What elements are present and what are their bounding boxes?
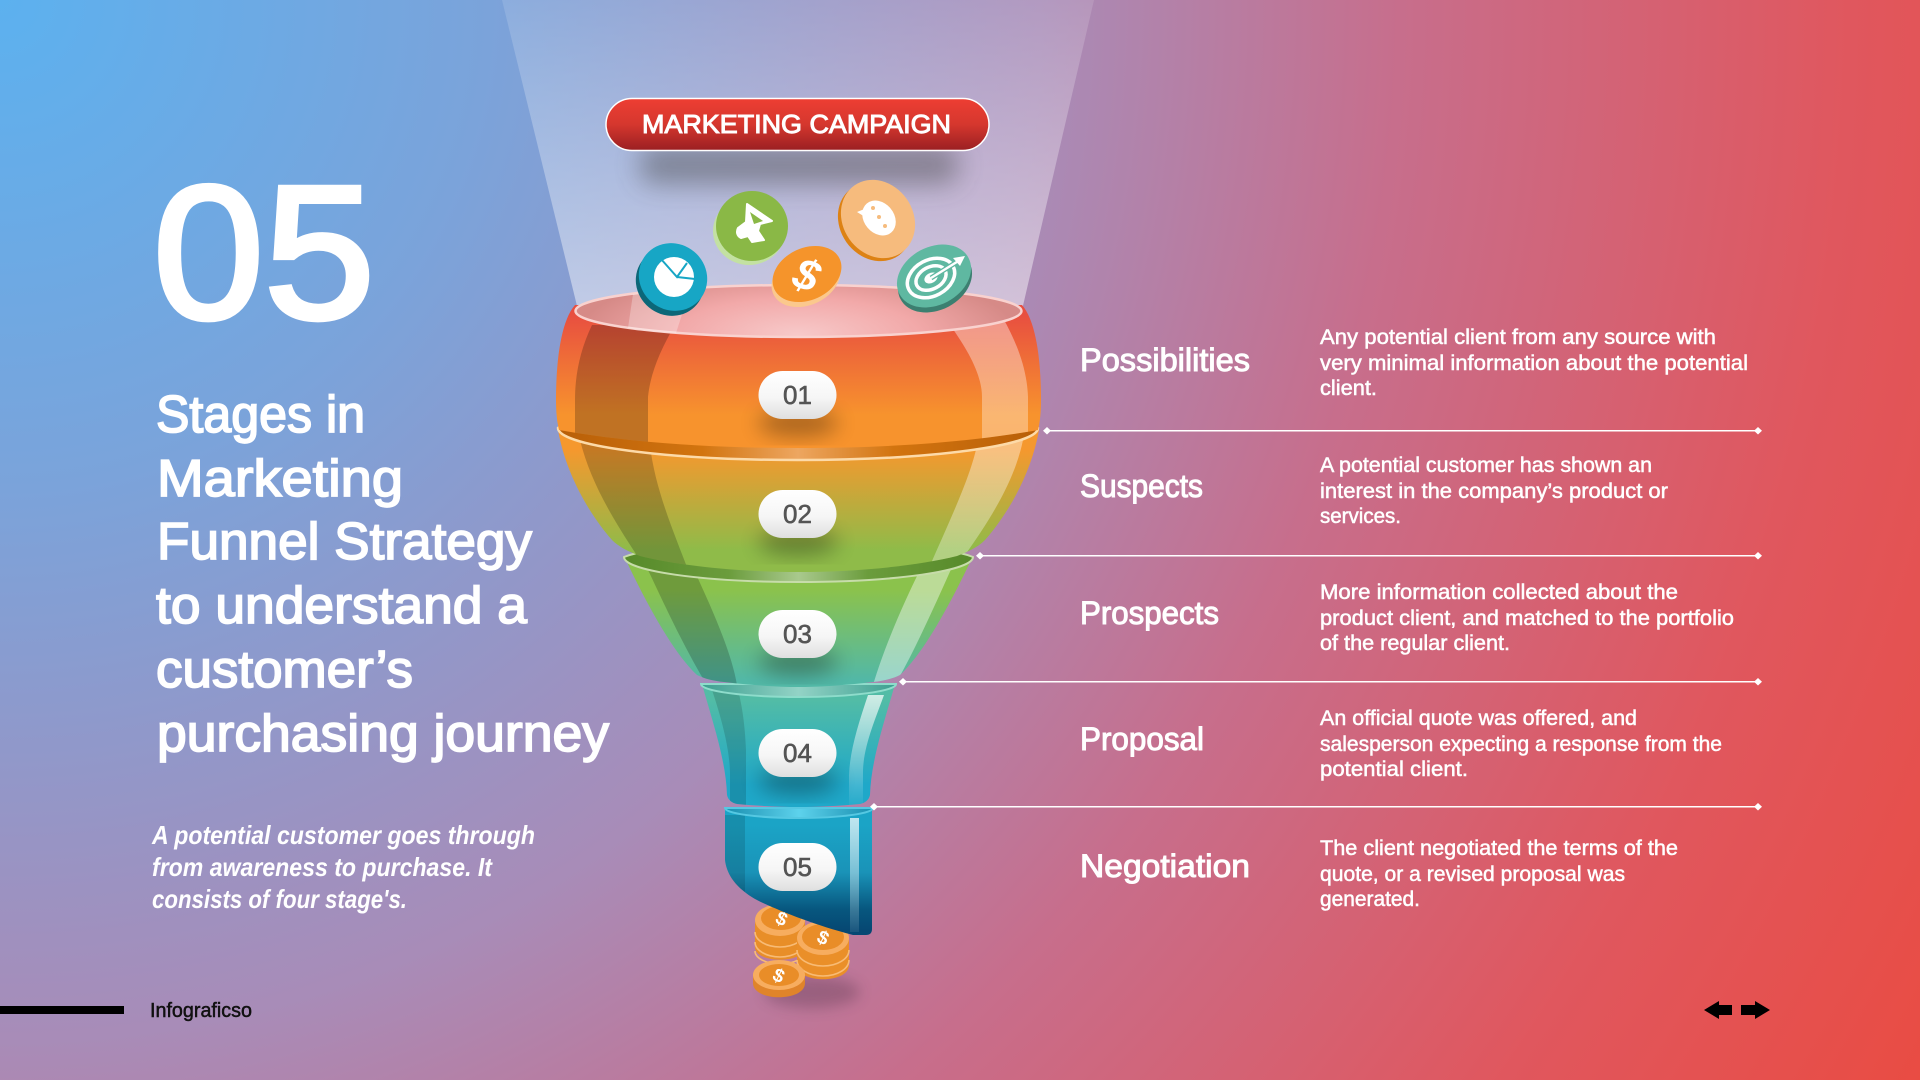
pill 01: [758, 371, 836, 419]
stage: Prospects: product client, and matched to the portfolio: [1320, 607, 1734, 630]
divider line 2: [976, 552, 1762, 560]
icon: target coin: [886, 232, 983, 325]
pill 03: [758, 610, 836, 658]
light beam: [502, 0, 1094, 310]
heading: to understand a: [156, 577, 527, 635]
gold coin stacks: $: [769, 965, 788, 988]
funnel stage 01: [556, 305, 1041, 450]
heading: purchasing journey: [157, 705, 609, 763]
stage: Prospects: More information collected about the: [1320, 581, 1678, 604]
stage: Suspects: A potential customer has shown an: [1320, 454, 1652, 477]
stage: Proposal: salesperson expecting a response from the: [1320, 733, 1722, 756]
gold coin stacks: [753, 904, 860, 1008]
stage: Negotiation: [1080, 837, 1678, 911]
funnel ring 02: [558, 420, 1038, 460]
funnel top opening: [576, 285, 1022, 337]
pill 01: 01: [783, 380, 812, 410]
heading: Marketing: [157, 450, 403, 508]
icon: dollar coin: $: [786, 248, 827, 303]
footer arrows: [1704, 1001, 1770, 1019]
funnel ring 04: [701, 684, 896, 697]
gold coin stacks: $: [772, 908, 791, 931]
icon: megaphone coin: [713, 191, 788, 265]
footer bar: [0, 1006, 124, 1014]
pill 02: 02: [783, 499, 812, 529]
stage: Negotiation: quote, or a revised proposal was: [1320, 863, 1625, 886]
stage: Possibilities: very minimal information about the potential: [1320, 352, 1748, 375]
funnel stage 03: [625, 558, 972, 687]
subtitle: [151, 820, 535, 914]
heading: [156, 386, 609, 763]
icon: chat coin: [823, 165, 930, 276]
funnel stage 05: [725, 808, 872, 935]
pill 03: 03: [783, 619, 812, 649]
stage: Possibilities: Possibilities: [1080, 342, 1250, 378]
stage: Proposal: potential client.: [1320, 758, 1468, 781]
subtitle: from awareness to purchase. It: [152, 852, 493, 882]
stage: Possibilities: Any potential client from any source with: [1320, 326, 1716, 349]
stage: Prospects: [1080, 581, 1734, 655]
heading: Stages in: [156, 386, 365, 444]
big number 05: 05: [153, 147, 375, 359]
footer brand: Infograficso: [150, 1000, 252, 1022]
banner: marketing campaign: [606, 98, 989, 150]
banner: marketing campaign: MARKETING CAMPAIGN: [642, 109, 951, 139]
funnel ring 05: [725, 808, 873, 818]
stage: Proposal: An official quote was offered, and: [1320, 707, 1637, 730]
stage: Possibilities: client.: [1320, 377, 1377, 400]
heading: Funnel Strategy: [157, 513, 532, 571]
gold coin stacks: $: [814, 927, 832, 950]
funnel ring 03: [624, 552, 973, 582]
stage: Suspects: [1080, 454, 1668, 528]
stage: Proposal: [1080, 707, 1722, 781]
stage: Suspects: services.: [1320, 505, 1401, 528]
pill 04: 04: [783, 738, 812, 768]
pill 05: 05: [783, 852, 812, 882]
subtitle: consists of four stage's.: [152, 884, 407, 914]
stage: Negotiation: generated.: [1320, 888, 1420, 911]
stage number pills: [758, 371, 838, 891]
icon: pie chart coin: [622, 229, 721, 330]
divider line 1: [1043, 427, 1762, 434]
funnel stage 02: [558, 430, 1039, 575]
pill 05: [758, 843, 836, 891]
banner shadow: [640, 146, 958, 184]
stage: Suspects: Suspects: [1080, 468, 1203, 504]
funnel stage 04: [702, 684, 895, 807]
stage: Negotiation: The client negotiated the terms of the: [1320, 837, 1678, 860]
divider line 4: [870, 803, 1762, 810]
divider line 3: [899, 678, 1762, 686]
stage: Suspects: interest in the company’s product or: [1320, 480, 1668, 503]
pill shadows: [758, 409, 838, 795]
funnel: [556, 285, 1041, 935]
subtitle: A potential customer goes through: [151, 820, 535, 850]
heading: customer’s: [156, 641, 413, 699]
stage: Prospects: Prospects: [1080, 595, 1219, 631]
pill 02: [758, 490, 836, 538]
icon: dollar coin: [762, 235, 851, 318]
stage: Prospects: of the regular client.: [1320, 632, 1510, 655]
pill 04: [758, 729, 836, 777]
stage: Negotiation: Negotiation: [1080, 848, 1250, 884]
stage: Proposal: Proposal: [1080, 721, 1204, 757]
stage: Possibilities: [1080, 326, 1748, 400]
